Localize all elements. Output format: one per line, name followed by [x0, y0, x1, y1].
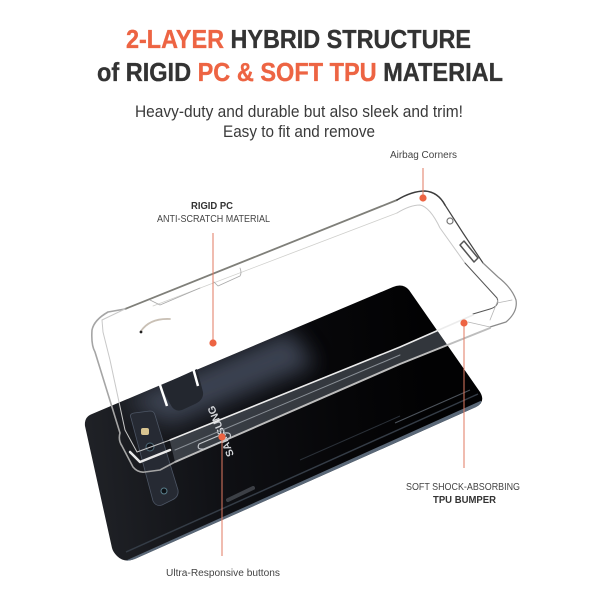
charging port [228, 488, 253, 500]
clear case [92, 191, 516, 472]
leader line [212, 233, 214, 343]
corner right inner [465, 263, 498, 314]
callout: ultra-responsive buttons [166, 433, 280, 579]
camera module [130, 411, 178, 506]
label text: SOFT SHOCK-ABSORBING [406, 482, 520, 493]
phone [85, 286, 490, 566]
title line 1: 2-LAYER HYBRID STRUCTURE [126, 24, 471, 54]
case bottom edge [170, 315, 473, 440]
phone shading and edge [126, 327, 482, 561]
case right edge [445, 205, 483, 263]
corner right [483, 263, 516, 327]
corner right detail [468, 300, 512, 327]
corner top inner [397, 205, 465, 263]
corner bottom highlight [130, 450, 170, 462]
corner top [397, 191, 445, 205]
leader line [422, 168, 424, 198]
marker dot [419, 194, 427, 202]
marker dot [218, 433, 226, 441]
subtitle [135, 103, 463, 141]
cutout reflection [160, 369, 203, 411]
brand name: SAMSUNG [206, 404, 237, 458]
lower lens [161, 488, 167, 494]
subtitle line 1: Heavy-duty and durable but also sleek and trim! [135, 103, 463, 121]
infographic canvas [84, 30, 520, 578]
corner left [92, 309, 175, 472]
marker dot [209, 339, 217, 347]
camera flash [141, 428, 149, 435]
volume button [198, 433, 230, 449]
leader line [463, 323, 465, 468]
leader line [221, 437, 223, 556]
label: Ultra-Responsive buttons [166, 568, 280, 579]
title [97, 24, 503, 87]
case bottom edge outer [175, 328, 490, 462]
callout: rigid pc [157, 201, 270, 347]
title line 2: of RIGID PC & SOFT TPU MATERIAL [97, 57, 503, 87]
case band midline [175, 355, 400, 450]
subtitle line 2: Easy to fit and remove [223, 123, 375, 141]
callout: airbag corners [390, 150, 457, 202]
callout: tpu bumper [406, 319, 520, 506]
label: Airbag Corners [390, 150, 457, 161]
label heading: RIGID PC [191, 201, 233, 212]
case inner top line [153, 213, 397, 306]
fingerprint glare [160, 368, 198, 406]
label text: ANTI-SCRATCH MATERIAL [157, 214, 270, 225]
phone body [85, 286, 482, 561]
camera lens [146, 443, 154, 451]
camera cutout mark [140, 331, 142, 333]
side buttons [460, 241, 478, 262]
case top edge [125, 200, 397, 309]
corner left inner [102, 309, 170, 452]
side hole [447, 218, 453, 224]
marker dot [460, 319, 468, 327]
camera cutout edge [141, 319, 170, 331]
top side notches [150, 268, 241, 305]
label heading: TPU BUMPER [433, 495, 497, 506]
